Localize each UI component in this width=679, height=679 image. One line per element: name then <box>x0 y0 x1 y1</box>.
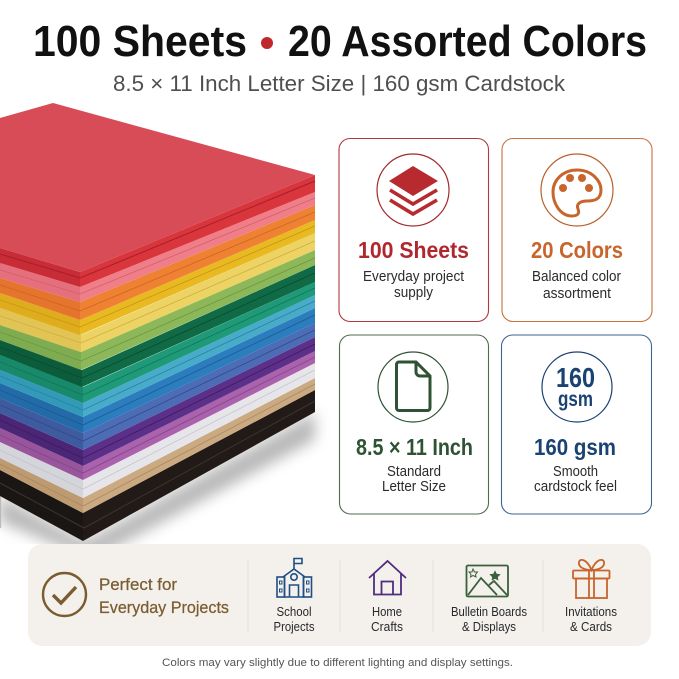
footnote: Colors may vary slightly due to different lighting and display settings. <box>162 657 513 669</box>
icon: school <box>277 558 312 597</box>
card: letter size: Letter Size <box>382 479 446 495</box>
label: invitations and cards: Invitations <box>565 604 617 619</box>
label: invitations and cards: & Cards <box>570 619 612 634</box>
perfect for text <box>99 575 229 617</box>
blue sheets <box>0 308 315 433</box>
icon: palette <box>553 170 601 216</box>
card: 160 gsm: 160 gsm <box>534 434 616 460</box>
card: 20 colors: Balanced color <box>532 269 621 285</box>
purple sheets <box>0 337 315 466</box>
card: 20 colors: assortment <box>543 286 611 302</box>
pink sheets <box>0 192 315 302</box>
card: letter size <box>340 335 488 514</box>
icon: layered sheets <box>389 166 438 214</box>
label: home crafts <box>371 604 403 634</box>
card: 160 gsm: Smooth <box>553 464 598 480</box>
card: 20 colors: 20 Colors <box>531 237 623 263</box>
icon: bulletin board <box>466 566 508 596</box>
subtitle: 8.5 × 11 Inch Letter Size | 160 gsm Cardstock <box>113 71 566 96</box>
orchid sheets <box>0 351 315 480</box>
icon: 160 gsm badge: 160 <box>556 362 595 393</box>
periwinkle sheets <box>0 323 315 450</box>
label: school projects: Projects <box>274 619 314 634</box>
card: 100 sheets: 100 Sheets <box>358 237 469 263</box>
card: 160 gsm <box>502 335 652 514</box>
gold sheets <box>0 220 315 335</box>
label: school projects <box>274 604 314 634</box>
icon: 160 gsm badge: gsm <box>558 388 593 411</box>
perfect for text: Perfect for <box>99 575 177 594</box>
label: bulletin boards and displays: & Displays <box>462 619 516 634</box>
card: 20 colors <box>502 138 652 322</box>
paper stack photo <box>0 103 315 560</box>
label: school projects: School <box>276 604 312 619</box>
card: letter size: 8.5 × 11 Inch <box>356 434 473 460</box>
light yellow sheets <box>0 233 315 352</box>
dark green sheets <box>0 265 315 387</box>
label: home crafts: Crafts <box>371 619 403 634</box>
title: 100 Sheets <box>33 17 247 66</box>
light green sheets <box>0 250 315 370</box>
card: letter size: Standard <box>387 464 441 480</box>
label: bulletin boards and displays <box>451 604 527 634</box>
bottom panel: everyday projects <box>28 544 651 646</box>
title: 20 Assorted Colors <box>288 17 647 66</box>
black sheets <box>0 390 315 541</box>
cyan sheets <box>0 295 315 417</box>
teal sheets <box>0 282 315 403</box>
icon: 160 gsm badge <box>556 362 595 411</box>
icon: gift <box>573 560 610 598</box>
card: 100 sheets <box>339 138 488 322</box>
icon: home <box>369 561 406 594</box>
top sheet <box>0 103 315 272</box>
card: 100 sheets: Everyday project <box>363 269 464 285</box>
red sheets <box>0 175 315 287</box>
perfect for text: Everyday Projects <box>99 598 229 617</box>
card: 100 sheets: supply <box>394 285 434 301</box>
tan sheets <box>0 378 315 513</box>
label: home crafts: Home <box>372 604 402 619</box>
orange sheets <box>0 205 315 320</box>
label: bulletin boards and displays: Bulletin Boards <box>451 604 527 619</box>
title <box>33 17 647 66</box>
icon: check badge <box>43 573 86 616</box>
icon: document <box>396 362 430 410</box>
label: invitations and cards <box>565 604 617 634</box>
card: 160 gsm: cardstock feel <box>534 479 617 495</box>
white sheets <box>0 363 315 498</box>
